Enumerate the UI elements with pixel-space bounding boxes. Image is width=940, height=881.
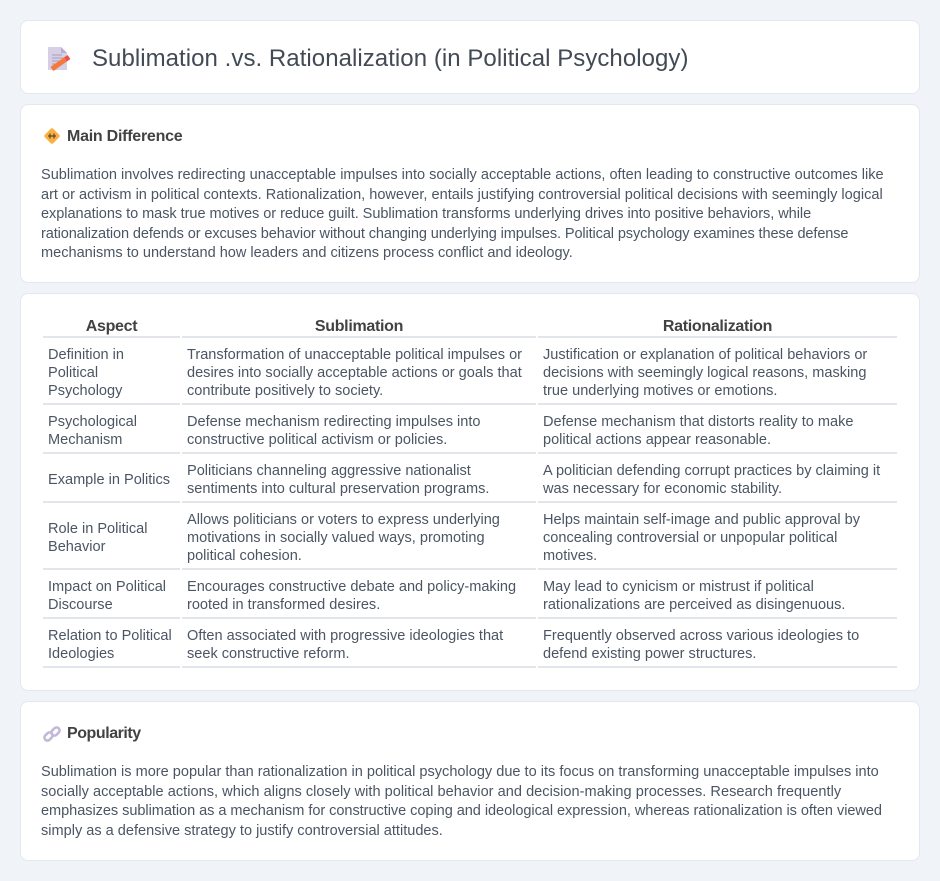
table header row: Sublimation [315,318,403,335]
table header row [86,318,772,335]
row: example in politics: sentiments into cultural preservation programs. [187,481,489,497]
row: relation to political ideologies: Frequently observed across various ideologies to [543,628,859,644]
row: impact on political discourse: rationalizations are perceived as disingenuous. [543,597,845,613]
row: relation to political ideologies: Often associated with progressive ideologies that [187,628,503,644]
text: popularity paragraph: emphasizes sublimation as a mechanism for constructive coping and ideological expression, whereas rationalization is often viewed [41,803,882,819]
text: popularity paragraph: simply as a defensive strategy to justify controversial attitudes. [41,823,443,839]
text: main difference paragraph: rationalization defends or excuses behavior without changing underlying impulses. Political psychology examines these defense [41,226,848,242]
text: main difference paragraph: explanations to mask true motives or reduce guilt. Sublimation transforms underlying drives into positive behaviors, while [41,206,811,222]
row: relation to political ideologies: defend existing power structures. [543,646,756,662]
table header row: Rationalization [663,318,772,335]
row: definition: Definition in [48,347,124,363]
table: comparison [43,318,897,668]
text: popularity paragraph: socially acceptable actions, which aligns closely with political behavior and decision-making processes. Research frequently [41,784,841,800]
row: example in politics: Example in Politics [48,472,170,488]
row: impact on political discourse: May lead to cynicism or mistrust if political [543,579,814,595]
row: psychological mechanism: Psychological [48,414,137,430]
row: definition [48,347,867,399]
title: Sublimation .vs. Rationalization (in Political Psychology) [92,45,689,72]
row: example in politics: was necessary for economic stability. [543,481,782,497]
row: example in politics: Politicians channeling aggressive nationalist [187,463,471,479]
row: definition: true underlying motives or emotions. [543,383,777,399]
icon: link [43,726,61,742]
heading: popularity: Popularity [67,725,141,742]
row: role in political behavior: Role in Political [48,521,147,537]
row: definition: Justification or explanation of political behaviors or [543,347,867,363]
row: definition: desires into socially acceptable actions or goals that [187,365,522,381]
row: role in political behavior: Allows politicians or voters to express underlying [187,512,500,528]
text: main difference paragraph [41,167,884,261]
row: psychological mechanism: political actions appear reasonable. [543,432,771,448]
row: role in political behavior: motives. [543,548,597,564]
row: psychological mechanism: Defense mechanism that distorts reality to make [543,414,853,430]
row: impact on political discourse: rooted in transformed desires. [187,597,380,613]
row: psychological mechanism: Mechanism [48,432,122,448]
row: relation to political ideologies [48,628,859,662]
row: psychological mechanism [48,414,853,448]
row: relation to political ideologies: seek constructive reform. [187,646,350,662]
row: psychological mechanism: constructive political activism or policies. [187,432,447,448]
text: main difference paragraph: mechanisms to understand how leaders and citizens process conflict and ideology. [41,245,573,261]
panel: main difference [20,104,920,283]
row: impact on political discourse [48,579,845,613]
row: example in politics [48,463,880,497]
row: definition: Political [48,365,98,381]
row: definition: Psychology [48,383,122,399]
row: role in political behavior: political cohesion. [187,548,302,564]
panel: comparison table [20,293,920,691]
row: definition: decisions with seemingly logical reasons, masking [543,365,866,381]
panel: header [20,20,920,94]
row: example in politics: A politician defending corrupt practices by claiming it [543,463,880,479]
text: popularity paragraph [41,764,882,839]
heading: main difference: Main Difference [67,128,182,145]
row: role in political behavior: Helps maintain self-image and public approval by [543,512,860,528]
icon: document with pencil [48,47,70,71]
row: relation to political ideologies: Ideologies [48,646,114,662]
row: role in political behavior: concealing controversial or unpopular political [543,530,837,546]
row: role in political behavior: motivations in socially valued ways, promoting [187,530,485,546]
panel: popularity [20,701,920,861]
text: main difference paragraph: Sublimation involves redirecting unacceptable impulses into socially acceptable actions, often leading to constructive outcomes like [41,167,884,183]
row: role in political behavior: Behavior [48,539,105,555]
row: definition: contribute positively to society. [187,383,383,399]
row: impact on political discourse: Impact on Political [48,579,166,595]
text: popularity paragraph: Sublimation is more popular than rationalization in political psychology due to its focus on transforming unacceptable impulses into [41,764,879,780]
row: definition: Transformation of unacceptable political impulses or [187,347,522,363]
row: psychological mechanism: Defense mechanism redirecting impulses into [187,414,480,430]
table header row: Aspect [86,318,137,335]
text: main difference paragraph: art or activism in political contexts. Rationalization, however, entails justifying controversial political decisions with seemingly logical [41,187,883,203]
row: role in political behavior [48,512,860,564]
row: impact on political discourse: Encourages constructive debate and policy-making [187,579,516,595]
row: relation to political ideologies: Relation to Political [48,628,172,644]
icon: diamond sign [44,128,60,144]
row: impact on political discourse: Discourse [48,597,113,613]
